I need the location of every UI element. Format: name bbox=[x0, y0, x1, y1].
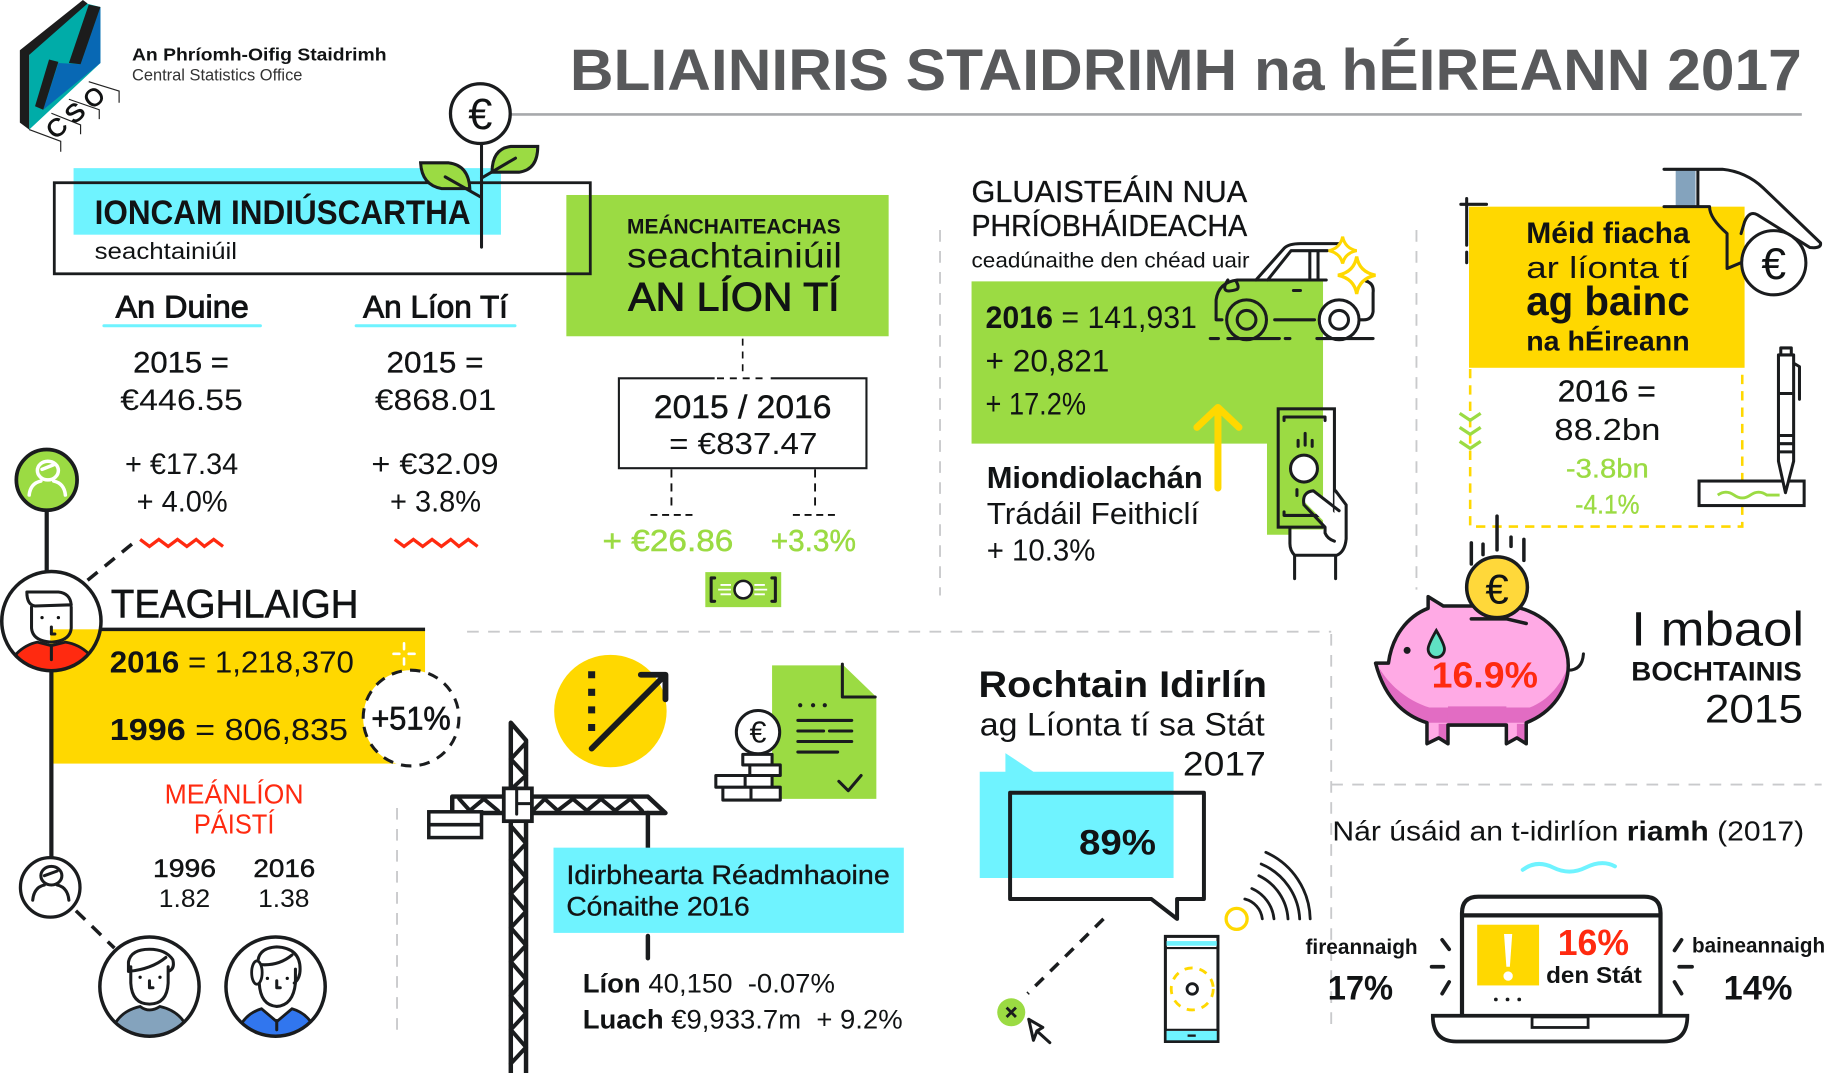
panel: new cars figures bbox=[972, 281, 1323, 535]
panel: household average box: + €26.86 bbox=[603, 525, 733, 558]
text: volume and value: Líon 40,150 -0.07% bbox=[583, 968, 835, 998]
title: BLIAINIRIS STAIDRIMH na hÉIREANN 2017 bbox=[570, 37, 1802, 103]
logo text: Central Statistics Office bbox=[132, 66, 302, 85]
text: average children: MEÁNLÍON bbox=[165, 778, 304, 809]
text: volume and value bbox=[583, 968, 903, 1035]
column: person: €446.55 bbox=[120, 385, 243, 417]
heading: internet access: 2017 bbox=[1183, 745, 1266, 783]
column: household bbox=[356, 289, 515, 546]
text: average children bbox=[153, 778, 315, 913]
icon: girl portrait bbox=[226, 937, 325, 1041]
icon: hand with coin: € bbox=[1761, 240, 1786, 289]
icon: wifi signal bbox=[1226, 852, 1310, 929]
icon: hand with coin bbox=[1664, 169, 1821, 295]
panel: household expenditure: seachtainiúil bbox=[627, 236, 842, 275]
text: 2016 households: 2016 = 1,218,370 bbox=[110, 647, 354, 680]
logo text bbox=[132, 45, 387, 85]
column: household: An Líon Tí bbox=[363, 289, 508, 325]
heading: disposable income: IONCAM INDIÚSCARTHA bbox=[95, 194, 471, 232]
column: household: + €32.09 bbox=[371, 449, 499, 481]
text: average children: 1.82 bbox=[159, 886, 210, 913]
column: household: 2015 = bbox=[387, 347, 483, 379]
heading: new private cars bbox=[972, 176, 1249, 272]
icon: person outline bbox=[20, 858, 80, 917]
panel: mortgage debt: Méid fiacha bbox=[1526, 218, 1690, 250]
text: at risk of poverty: 2015 bbox=[1705, 688, 1803, 732]
text: males: 17% bbox=[1328, 969, 1393, 1007]
text: at risk of poverty: BOCHTAINIS bbox=[1631, 657, 1802, 687]
panel: new cars figures: + 20,821 bbox=[986, 342, 1109, 378]
panel: mortgage debt: ag bainc bbox=[1526, 278, 1690, 324]
column: person: An Duine bbox=[116, 289, 249, 325]
panel: household average box bbox=[603, 339, 866, 558]
text: motor trades bbox=[987, 462, 1203, 567]
panel: household expenditure: AN LÍON TÍ bbox=[628, 276, 840, 320]
icon: document and coins: € bbox=[750, 716, 767, 750]
column: household: + 3.8% bbox=[390, 486, 481, 518]
icon: euro plant bbox=[421, 84, 538, 247]
panel: household average box: +3.3% bbox=[771, 525, 856, 558]
text: 16% of state: 16% bbox=[1558, 922, 1629, 963]
text: at risk of poverty: I mbaol bbox=[1631, 604, 1804, 657]
panel: mortgage debt bbox=[1460, 198, 1745, 527]
panel: mortgage debt: 88.2bn bbox=[1554, 414, 1661, 447]
text: motor trades: + 10.3% bbox=[987, 534, 1095, 567]
text: never used internet: Nár úsáid an t-idirlíon riamh (2017) bbox=[1332, 816, 1804, 847]
icon: car bbox=[1210, 237, 1375, 340]
heading: new private cars: GLUAISTEÁIN NUA bbox=[972, 176, 1248, 209]
icon: man portrait bbox=[2, 572, 109, 677]
text: 1996 households: 1996 = 806,835 bbox=[110, 714, 348, 747]
icon: banknote bbox=[705, 572, 781, 607]
panel: new cars figures: 2016 = 141,931 bbox=[986, 299, 1197, 335]
text: average children: 1996 bbox=[153, 856, 216, 883]
heading: new private cars: ceadúnaithe den chéad uair bbox=[972, 247, 1249, 272]
panel: disposable income bbox=[54, 168, 889, 336]
logo: CSO: O bbox=[79, 82, 110, 114]
column: person: 2015 = bbox=[133, 347, 229, 379]
icon: piggy bank: € bbox=[1485, 566, 1509, 613]
logo: CSO bbox=[20, 0, 119, 152]
heading: internet access: ag Líonta tí sa Stát bbox=[980, 706, 1265, 743]
text: females: 14% bbox=[1724, 969, 1792, 1007]
panel: new cars figures: + 17.2% bbox=[986, 385, 1086, 421]
column: person: + 4.0% bbox=[137, 486, 228, 518]
arrow: up bbox=[1197, 407, 1239, 488]
heading: internet access: Rochtain Idirlín bbox=[979, 663, 1267, 705]
heading: new private cars: PHRÍOBHÁIDEACHA bbox=[972, 210, 1248, 243]
icon: cursor path bbox=[997, 919, 1104, 1043]
icon: growth arrow bbox=[554, 655, 667, 767]
icon: phone bbox=[1165, 936, 1218, 1041]
text: motor trades: Trádáil Feithiclí bbox=[987, 498, 1200, 531]
panel: household average box: 2015 / 2016 bbox=[654, 388, 831, 425]
callout: +51% bbox=[363, 670, 459, 766]
icon: laptop: den Stát bbox=[1546, 962, 1642, 988]
text: females bbox=[1692, 935, 1825, 1007]
panel: mortgage debt: ar líonta tí bbox=[1526, 252, 1690, 285]
text: average children: PÁISTÍ bbox=[194, 809, 275, 840]
text: average children: 2016 bbox=[253, 856, 315, 883]
panel: households bbox=[47, 509, 459, 859]
panel: residential property transactions: Cónaithe 2016 bbox=[566, 891, 750, 921]
icon: person green bbox=[16, 450, 77, 510]
column: person bbox=[104, 289, 260, 546]
text: males: fireannaigh bbox=[1306, 936, 1418, 959]
panel: mortgage debt: 2016 = bbox=[1558, 376, 1656, 409]
panel: household average box: = €837.47 bbox=[669, 428, 817, 461]
text: average children: 1.38 bbox=[258, 886, 309, 913]
icon: document and coins bbox=[716, 664, 876, 800]
heading: households: TEAGHLAIGH bbox=[111, 583, 358, 627]
icon: pen and signature bbox=[1699, 348, 1804, 506]
panel: household expenditure: MEÁNCHAITEACHAS bbox=[627, 216, 841, 239]
logo: CSO: S bbox=[60, 98, 91, 130]
callout: +51%: +51% bbox=[371, 700, 451, 737]
panel: residential property transactions bbox=[554, 848, 904, 933]
logo: CSO: C bbox=[41, 112, 73, 145]
panel: residential property transactions: Idirbhearta Réadmhaoine bbox=[566, 860, 890, 890]
text: motor trades: Miondiolachán bbox=[987, 462, 1203, 495]
text: volume and value: Luach €9,933.7m + 9.2% bbox=[583, 1005, 903, 1035]
icon: boy portrait bbox=[100, 937, 199, 1041]
heading: internet access bbox=[979, 663, 1267, 783]
panel: household expenditure bbox=[566, 195, 889, 336]
icon: speech bubble 89%: 89% bbox=[1079, 824, 1156, 863]
panel: mortgage debt: -3.8bn bbox=[1566, 454, 1649, 484]
text: poverty rate: 16.9% bbox=[1432, 655, 1538, 696]
subheading: weekly: seachtainiúil bbox=[95, 238, 237, 264]
text: females: baineannaigh bbox=[1692, 935, 1825, 958]
text: at risk of poverty bbox=[1631, 604, 1804, 732]
panel: mortgage debt: na hÉireann bbox=[1526, 325, 1690, 356]
column: household: €868.01 bbox=[375, 385, 496, 417]
icon: piggy bank bbox=[1376, 516, 1583, 744]
logo text: An Phríomh-Oifig Staidrimh bbox=[132, 45, 387, 65]
icon: speech bubble 89% bbox=[980, 753, 1204, 919]
text: males bbox=[1306, 936, 1418, 1007]
panel: mortgage debt: -4.1% bbox=[1575, 490, 1639, 520]
icon: laptop bbox=[1432, 897, 1692, 1041]
icon: hand with banknote bbox=[1278, 409, 1347, 579]
icon: crane bbox=[429, 723, 665, 1073]
column: person: + €17.34 bbox=[125, 449, 238, 481]
icon: euro plant: € bbox=[468, 91, 492, 139]
